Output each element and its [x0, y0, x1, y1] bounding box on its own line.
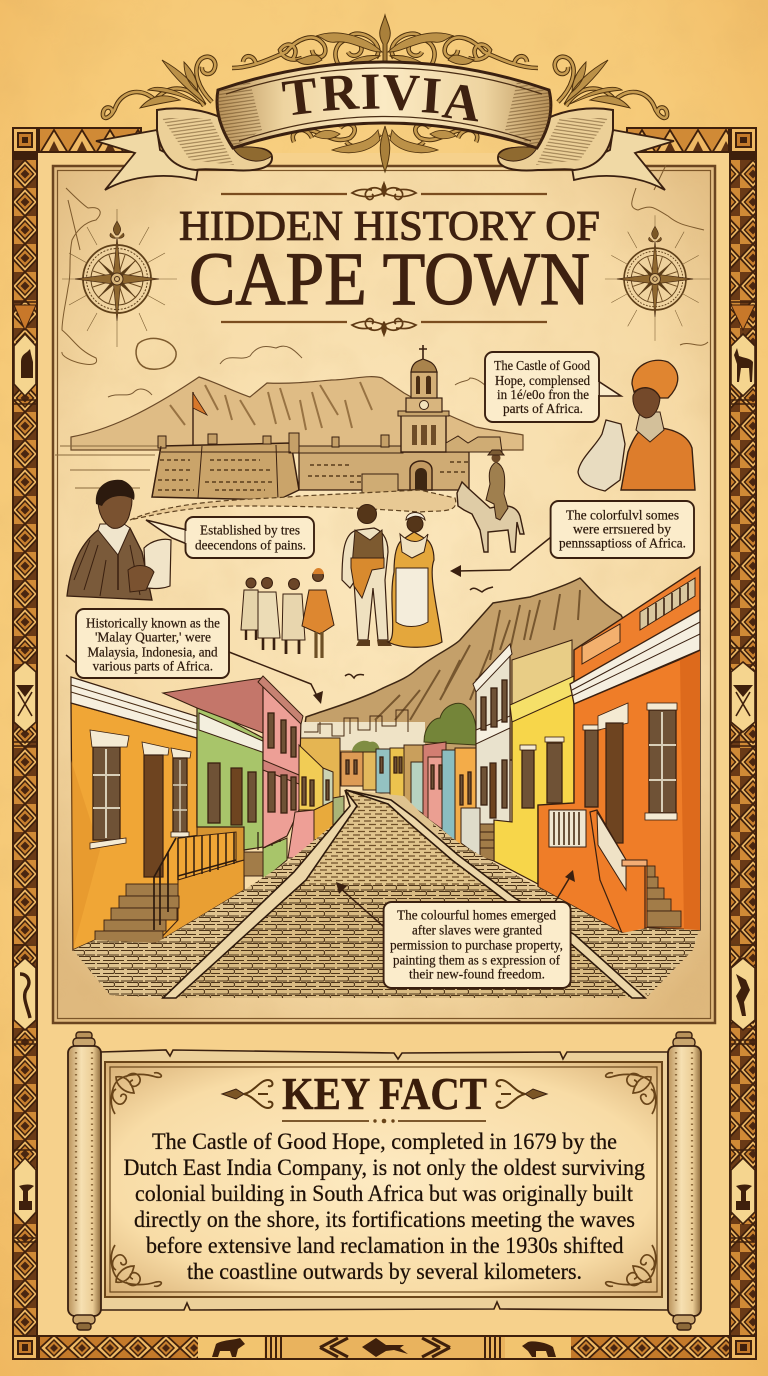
callout: castle: in 1é/e0o fron the	[497, 387, 589, 402]
scroll corner flourishes	[111, 1073, 656, 1286]
callout: Malay Quarter: various parts of Africa.	[93, 658, 213, 674]
road curbs	[163, 790, 645, 998]
subtitle: HIDDEN HISTORY OF: HIDDEN HISTORY OF	[179, 204, 600, 250]
castle: rocky foreground	[130, 490, 456, 520]
woman: dress	[621, 426, 695, 490]
scroll inner frame	[105, 1062, 662, 1297]
ornament: bottom divider	[221, 318, 547, 337]
key fact body text: Dutch East India Company, is not only the oldest surviving	[124, 1155, 645, 1180]
woman: turban	[632, 360, 678, 398]
low wall with fence	[156, 827, 244, 943]
border icon: animal cell left	[14, 305, 36, 396]
left stairs	[95, 838, 179, 943]
callout: established	[146, 517, 314, 558]
left sidewalk	[73, 803, 358, 998]
compass right	[605, 215, 710, 341]
callout: established: deecendons of pains.	[195, 538, 306, 552]
callout: colourful homes: permission to purchase property,	[390, 938, 563, 952]
callout: colourful homes: The colourful homes emerged	[397, 908, 556, 922]
castle: long wall	[299, 435, 470, 494]
illustration: castle of good hope	[130, 345, 502, 520]
right sidewalk	[348, 790, 699, 998]
callout: Malay Quarter: Malaysia, Indonesia, and	[88, 644, 218, 660]
border icon: plant left	[14, 1158, 36, 1224]
border icon: lizard left	[14, 958, 36, 1030]
key fact body text: the coastline outwards by several kilometers.	[187, 1259, 582, 1284]
callout: colourful homes: their new-found freedom.	[409, 966, 545, 982]
castle: bastion	[152, 433, 299, 500]
orange house windows and door	[583, 703, 677, 843]
child 3	[282, 578, 305, 654]
key fact body text: directly on the shore, its fortifications meeting the waves	[134, 1207, 635, 1232]
woman: face	[633, 388, 660, 418]
border: bottom band	[12, 1335, 757, 1360]
border icon: tile left	[14, 662, 36, 732]
houses: street end left	[299, 745, 344, 856]
child 2	[258, 578, 280, 650]
callout: castle: Hope, complensed	[495, 373, 590, 388]
castle: flag	[193, 392, 207, 445]
distant town	[301, 710, 425, 752]
ribbon: left tail	[96, 108, 272, 190]
figure: horse rider	[457, 450, 524, 552]
banner ornament	[103, 15, 667, 172]
ornament: top divider	[221, 181, 547, 200]
map outlines	[62, 165, 708, 369]
callout: Malay Quarter: 'Malay Quarter,' were	[95, 630, 211, 644]
title: CAPE TOWN: CAPE TOWN	[189, 238, 590, 321]
scroll right roller	[668, 1032, 701, 1330]
border: left band	[12, 127, 38, 1360]
callout: colorful somes: pennssaptioss of Africa.	[559, 536, 686, 550]
child 4	[302, 568, 334, 658]
key fact body text: before extensive land reclamation in the 1930s shifted	[146, 1233, 624, 1258]
callout: colorful somes: The colorfulvl somes	[566, 508, 679, 522]
TRIVIA ribbon banner	[96, 62, 674, 190]
stair side wall	[590, 810, 647, 933]
border icon: animal right	[731, 958, 755, 1030]
heading underline	[282, 1119, 486, 1123]
border: top band right	[626, 127, 757, 153]
border icon: plant right	[731, 1158, 755, 1224]
house: pink	[163, 676, 314, 858]
border icon: tile right	[731, 662, 755, 732]
illustration: table mountain and clouds	[55, 346, 523, 488]
main parchment panel	[38, 153, 729, 1335]
panel: key fact scroll	[68, 1032, 701, 1330]
figure: couple	[342, 504, 442, 647]
figure: man reading	[67, 480, 171, 600]
figure: children	[241, 568, 334, 658]
border: top band left	[12, 127, 142, 153]
callout: castle: The Castle of Good	[494, 358, 590, 373]
figure: woman with pot	[578, 360, 695, 491]
left house windows and door	[90, 730, 191, 877]
house: green	[197, 703, 287, 880]
border: right band	[729, 127, 757, 1360]
callout: castle: parts of Africa.	[503, 401, 583, 416]
scroll paper	[100, 1050, 668, 1310]
man in waistcoat	[342, 504, 392, 646]
key fact body text: The Castle of Good Hope, completed in 1679 by the	[152, 1129, 617, 1154]
callout: Malay Quarter	[66, 609, 323, 704]
border icon: deer cell right	[731, 305, 755, 396]
castle: bell tower	[398, 345, 449, 452]
child 1	[241, 578, 261, 640]
castle: houses	[446, 436, 502, 452]
trees	[424, 703, 477, 745]
far houses row	[299, 738, 476, 855]
birds	[345, 587, 493, 678]
callout: colourful homes	[336, 870, 575, 988]
callout: castle	[485, 352, 621, 422]
heading ornaments	[222, 1080, 547, 1108]
key fact body text	[124, 1129, 645, 1284]
woman: pot	[578, 420, 625, 491]
illustration: Signal Hill mountain	[300, 578, 640, 760]
key fact body text: colonial building in South Africa but was originally built	[135, 1181, 634, 1206]
compass left	[62, 209, 177, 347]
callout: colorful somes	[450, 501, 694, 577]
callout: colorful somes: were errsııered by	[573, 522, 671, 536]
woman: neck and collar	[636, 412, 664, 442]
callout: Malay Quarter: Historically known as the	[86, 616, 220, 630]
scroll left roller	[68, 1032, 101, 1330]
house: orange, left side	[71, 677, 244, 950]
house: yellow, right side	[461, 640, 574, 884]
woman in apron	[388, 512, 442, 647]
cobbled road	[176, 790, 635, 998]
callout: colourful homes: after slaves were granted	[412, 922, 542, 938]
callout: established: Established by tres	[200, 522, 300, 538]
heading: KEY FACT: KEY FACT	[282, 1068, 487, 1119]
callout: colourful homes: painting them as s expression of	[393, 952, 560, 968]
house: white, right side	[473, 644, 512, 835]
ribbon: main band	[217, 62, 551, 148]
illustration: Bo-Kaap street	[71, 567, 700, 998]
ribbon: right tail	[498, 108, 674, 190]
right stairs	[647, 866, 681, 927]
house: orange, right side	[538, 567, 700, 933]
heading: TRIVIA: TRIVIA	[280, 63, 484, 134]
balcony balustrade	[549, 810, 586, 847]
